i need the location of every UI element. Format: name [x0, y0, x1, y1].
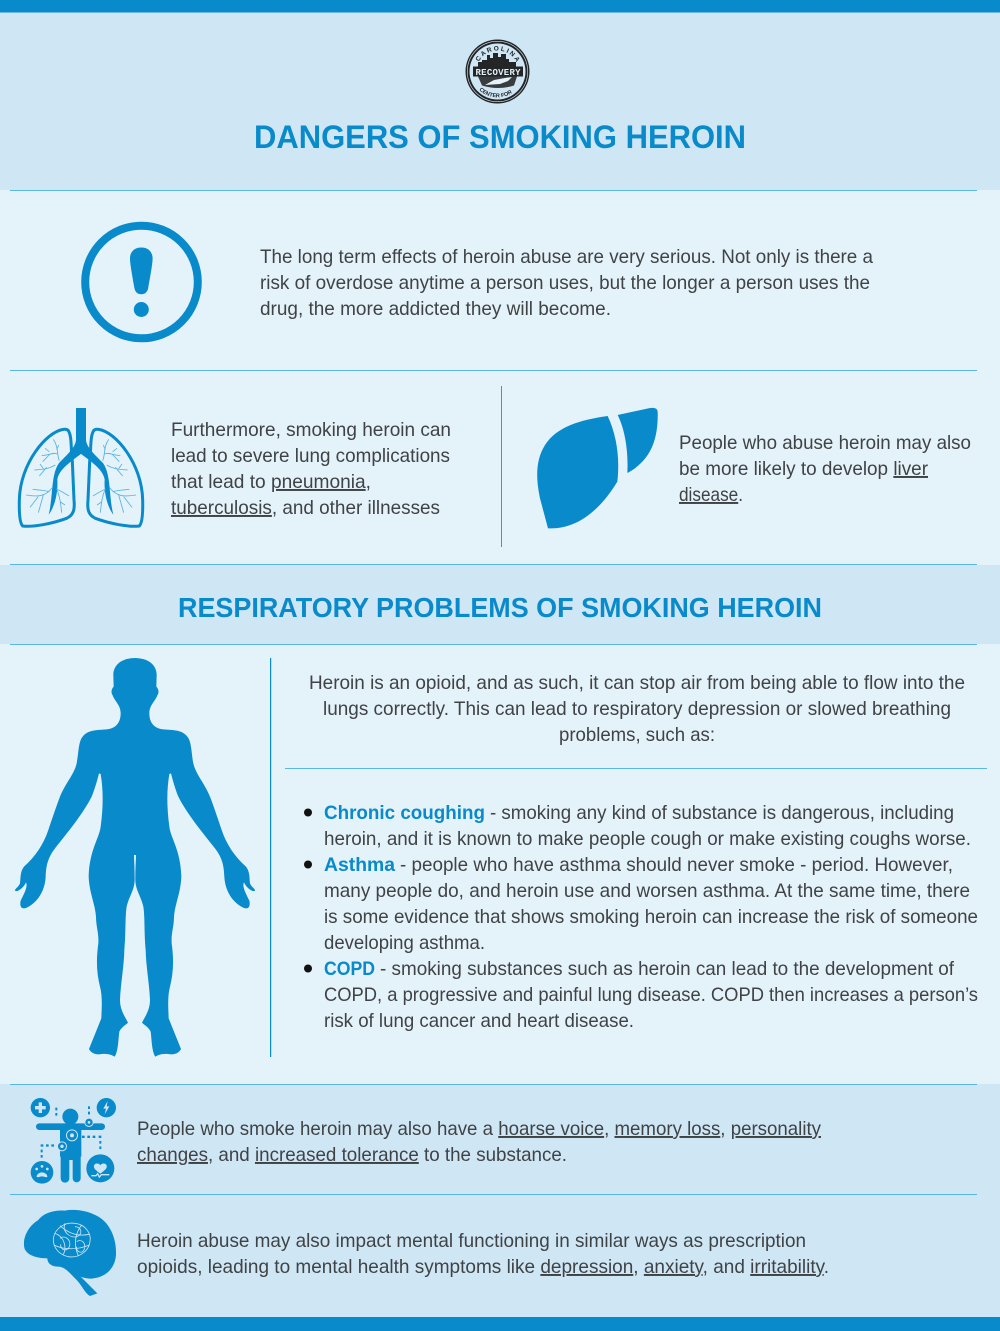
icon: Carolina Recovery Center logo: RECOVERY: [476, 68, 521, 78]
panel: other symptoms: [31, 1098, 821, 1184]
icon: Carolina Recovery Center logo: CAROLINA: [476, 46, 520, 62]
heading: respiratory problems: RESPIRATORY PROBLEMS OF SMOKING HEROIN: [178, 592, 822, 623]
icon: exclamation alert: [85, 226, 198, 338]
icon: Carolina Recovery Center logo: [466, 40, 530, 104]
text: opioid intro: problems, such as:: [559, 724, 715, 746]
list item: chronic coughing: [304, 802, 971, 850]
text: opioid intro: lungs correctly. This can lead to respiratory depression or slowed breathing: [323, 698, 951, 720]
panel: liver disease: [537, 408, 971, 528]
list item: chronic coughing: Chronic coughing: [324, 802, 485, 824]
text: other symptoms: People who smoke heroin may also have a hoarse voice, memory loss, personality: [137, 1118, 821, 1140]
text: liver disease: People who abuse heroin may also: [679, 432, 971, 454]
text: mental functioning: opioids, leading to mental health symptoms like depression, anxiety, and irritability.: [137, 1256, 829, 1278]
icon: human body silhouette: [15, 658, 255, 1057]
text: mental functioning: Heroin abuse may also impact mental functioning in similar ways as prescription: [137, 1230, 806, 1252]
text: opioid intro: Heroin is an opioid, and as such, it can stop air from being able to flow into the: [309, 672, 965, 694]
text: lung complications: Furthermore, smoking heroin can: [171, 419, 451, 441]
text: lung complications: tuberculosis, and other illnesses: [171, 497, 440, 519]
list item: asthma: is some evidence that shows smoking heroin can increase the risk of someone: [324, 906, 978, 928]
text: other symptoms: changes, and increased tolerance to the substance.: [137, 1144, 567, 1166]
text: long term effects: [260, 246, 873, 320]
text: liver disease: [679, 432, 971, 506]
text: lung complications: lead to severe lung complications: [171, 445, 450, 467]
list item: COPD: [304, 958, 978, 1032]
panel: long term effects: [85, 226, 873, 338]
text: other symptoms: [137, 1118, 821, 1166]
list item: chronic coughing: - smoking any kind of substance is dangerous, including: [490, 802, 954, 824]
list item: chronic coughing: heroin, and it is known to make people cough or make existing coughs worse.: [324, 828, 971, 850]
panel: lung complications: [19, 408, 451, 526]
list item: COPD: COPD: [324, 958, 375, 980]
list item: asthma: - people who have asthma should never smoke - period. However,: [400, 854, 953, 876]
list item: asthma: many people do, and heroin use and worsen asthma. At the same time, there: [324, 880, 970, 902]
text: lung complications: [171, 419, 451, 519]
list item: asthma: developing asthma.: [324, 932, 485, 954]
list item: COPD: - smoking substances such as heroin can lead to the development of: [380, 958, 955, 980]
text: long term effects: drug, the more addicted they will become.: [260, 298, 611, 320]
text: long term effects: risk of overdose anytime a person uses, but the longer a person uses the: [260, 272, 870, 294]
text: lung complications: that lead to pneumonia,: [171, 471, 371, 493]
icon: brain with tangle: [24, 1210, 116, 1296]
panel: mental functioning: [24, 1210, 829, 1296]
text: long term effects: The long term effects of heroin abuse are very serious. Not only is there a: [260, 246, 873, 268]
icon: Carolina Recovery Center logo: CENTER FOR: [480, 88, 512, 98]
icon: lungs: [19, 408, 143, 526]
text: liver disease: disease.: [679, 484, 743, 506]
list item: COPD: risk of lung cancer and heart disease.: [324, 1010, 634, 1032]
text: liver disease: be more likely to develop liver: [679, 458, 928, 480]
text: mental functioning: [137, 1230, 829, 1278]
icon: body with symptoms: [31, 1098, 116, 1184]
list item: COPD: COPD, a progressive and painful lung disease. COPD then increases a person’s: [324, 984, 978, 1006]
list item: asthma: Asthma: [324, 854, 395, 876]
list: respiratory problems: [304, 802, 978, 1032]
list item: asthma: [304, 854, 978, 954]
text: opioid intro: [309, 672, 965, 746]
title: DANGERS OF SMOKING HEROIN: [254, 119, 746, 155]
icon: liver: [537, 408, 658, 528]
